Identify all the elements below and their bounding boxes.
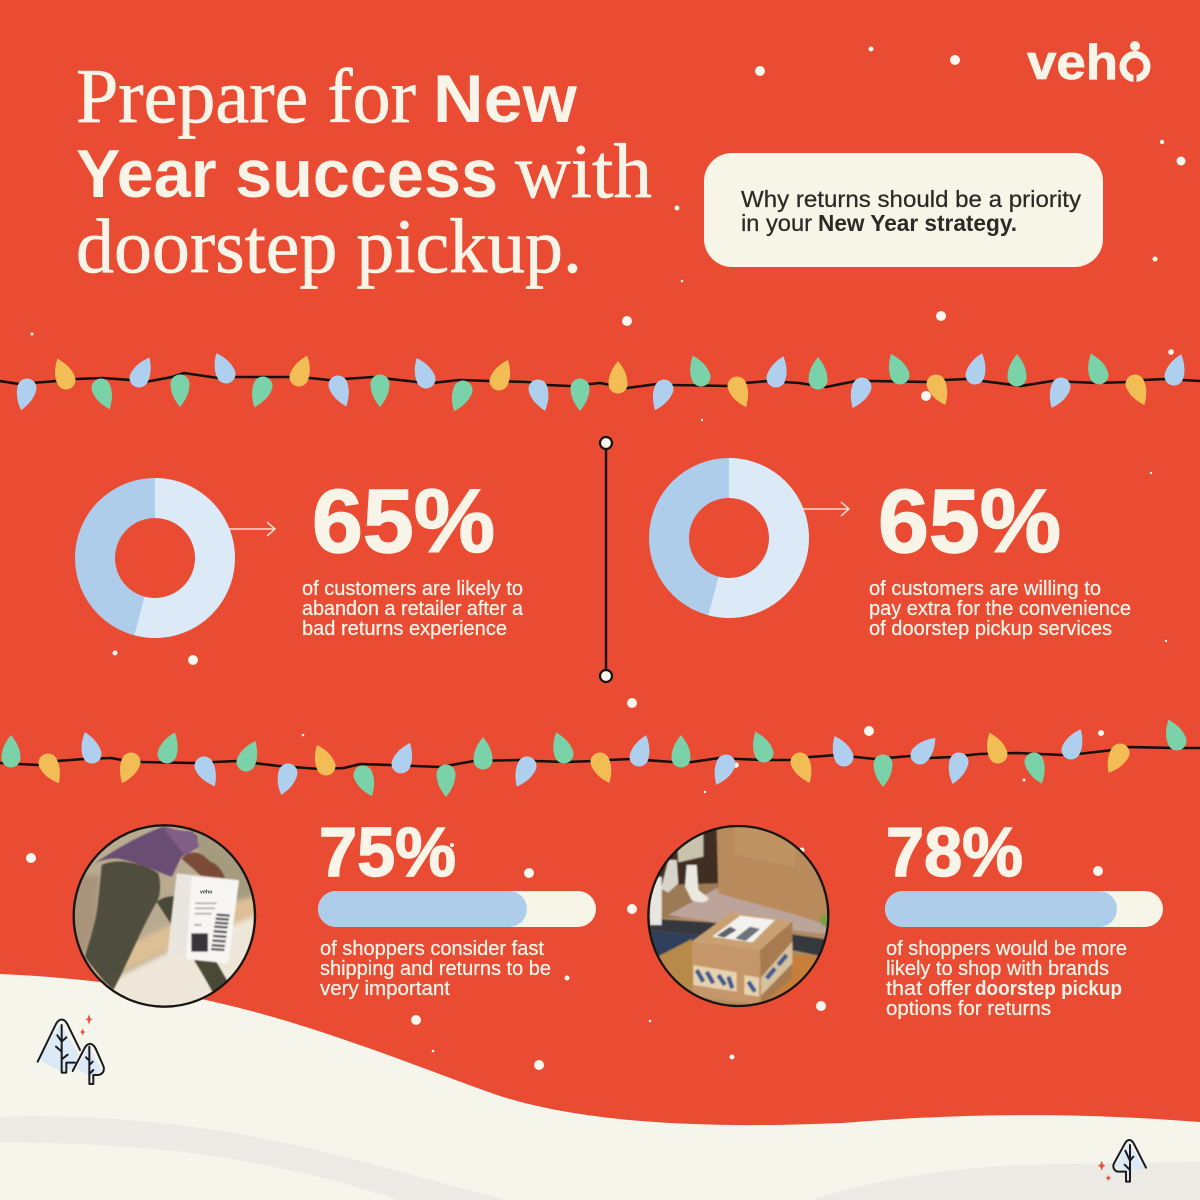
callout bbox=[704, 153, 1103, 267]
title bbox=[76, 53, 652, 289]
description left: bad returns experience bbox=[302, 618, 507, 640]
description 75: shipping and returns to be bbox=[320, 958, 551, 980]
icon: two trees bbox=[38, 1014, 104, 1084]
progress bar 78 bbox=[885, 891, 1163, 927]
description 78: doorstep pickup bbox=[975, 978, 1122, 1000]
description left bbox=[302, 578, 524, 640]
photo: parcel on doorstep bbox=[645, 822, 835, 1012]
callout: New Year strategy. bbox=[818, 210, 1017, 236]
stat: 78% bbox=[885, 813, 1163, 1020]
value 75: 75% bbox=[319, 813, 456, 891]
description 75 bbox=[320, 938, 551, 1000]
donut chart left bbox=[95, 478, 235, 638]
callout: Why returns should be a priority bbox=[741, 186, 1082, 212]
snow hills bbox=[0, 974, 1200, 1200]
logo: veho: veh bbox=[1027, 36, 1118, 90]
description 78: that offer bbox=[886, 978, 971, 1000]
stat: 65% pay extra bbox=[669, 458, 1131, 640]
description 75: of shoppers consider fast bbox=[320, 938, 544, 960]
description right: pay extra for the convenience bbox=[869, 598, 1131, 620]
description left: abandon a retailer after a bbox=[302, 598, 524, 620]
photo: person carrying parcel: veho bbox=[200, 890, 213, 896]
stat: 65% abandon bbox=[95, 472, 524, 640]
arrow right bbox=[803, 502, 849, 516]
title: Year success bbox=[76, 136, 498, 212]
description left: of customers are likely to bbox=[302, 578, 523, 600]
callout: in your bbox=[741, 210, 812, 236]
title: New bbox=[433, 61, 578, 137]
title: Prepare for bbox=[76, 53, 416, 139]
description right: of customers are willing to bbox=[869, 578, 1101, 600]
stat: 75% bbox=[318, 813, 596, 1000]
arrow left bbox=[229, 522, 275, 536]
progress bar 75 bbox=[318, 891, 596, 927]
description 78: of shoppers would be more bbox=[886, 938, 1127, 960]
donut chart right bbox=[669, 458, 809, 618]
description 78 bbox=[886, 938, 1127, 1020]
icon: single tree bbox=[1098, 1140, 1146, 1182]
photo: person carrying parcel bbox=[72, 824, 256, 1008]
description 78: likely to shop with brands bbox=[886, 958, 1109, 980]
description right bbox=[869, 578, 1131, 640]
vertical divider bbox=[600, 437, 612, 682]
string lights: bottom bbox=[0, 716, 1200, 800]
title: doorstep pickup. bbox=[76, 203, 582, 289]
value right: 65% bbox=[878, 472, 1061, 572]
description 78: options for returns bbox=[886, 998, 1051, 1020]
description 75: very important bbox=[320, 978, 450, 1000]
value left: 65% bbox=[312, 472, 495, 572]
description right: of doorstep pickup services bbox=[869, 618, 1112, 640]
title: with bbox=[515, 128, 652, 214]
string lights: top bbox=[0, 349, 1200, 415]
value 78: 78% bbox=[886, 813, 1023, 891]
